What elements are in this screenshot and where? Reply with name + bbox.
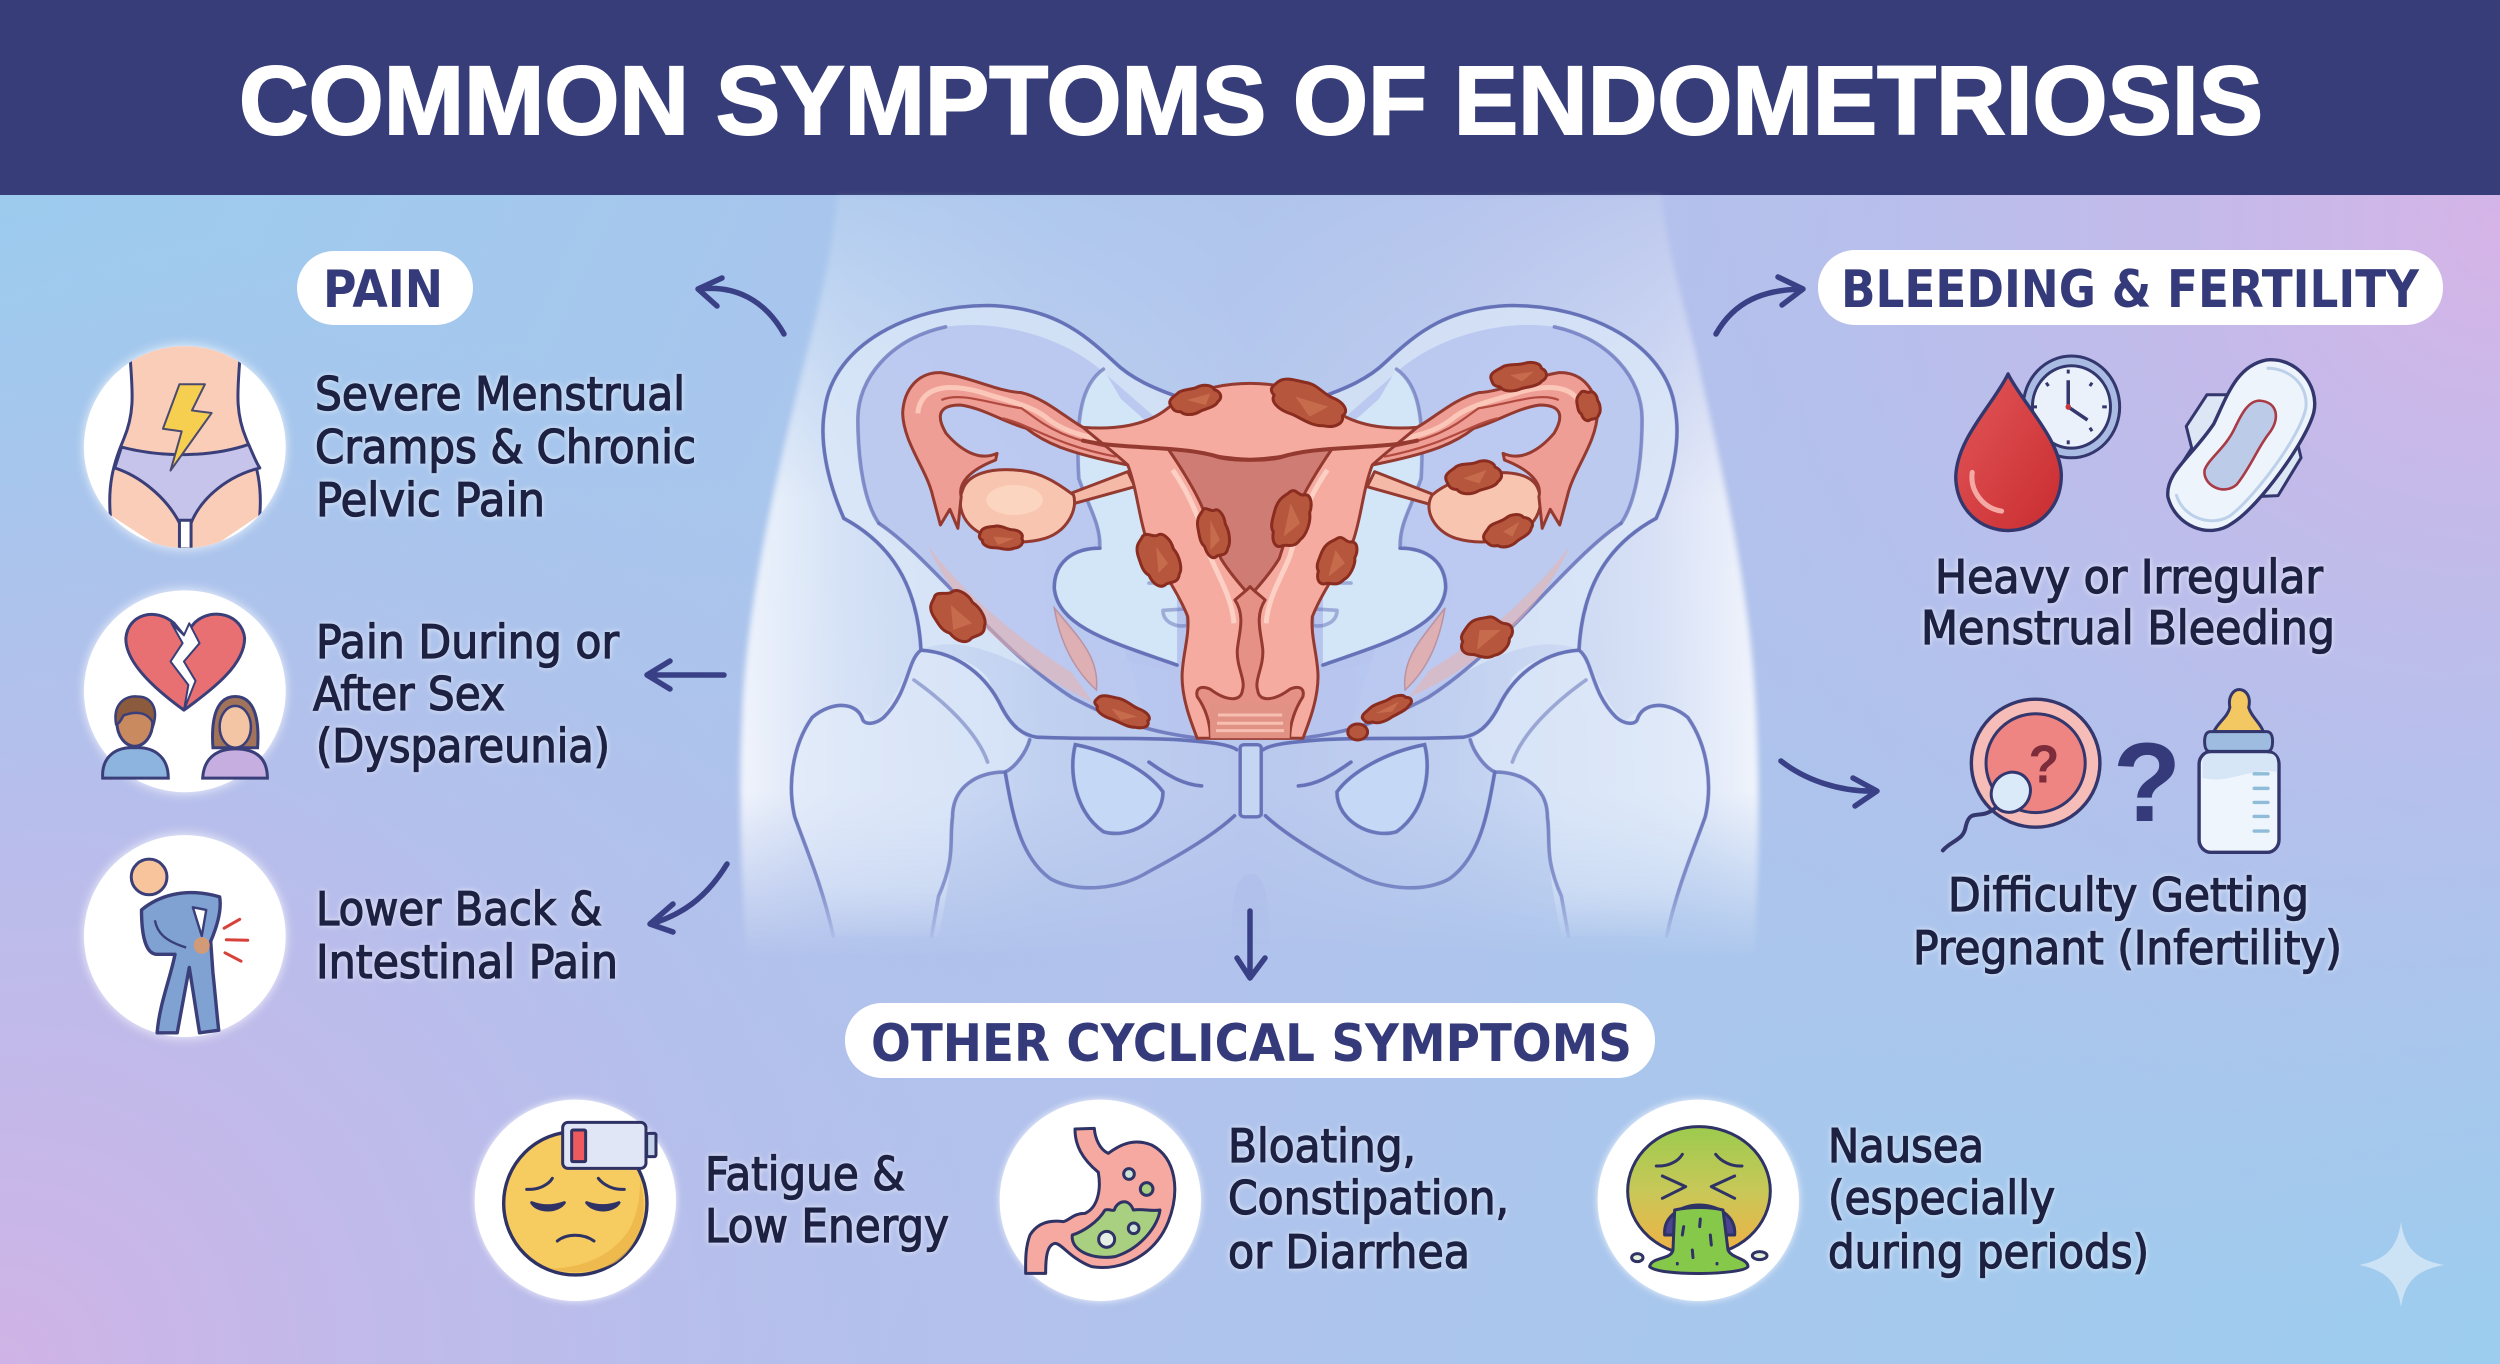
- icon: blood drop and clock: [1956, 356, 2120, 531]
- left half of pelvis: [791, 305, 1237, 936]
- uterine cavity: [1168, 449, 1332, 597]
- header banner: [0, 0, 2500, 195]
- pubic symphysis: [1240, 745, 1261, 817]
- text: pain during sex: [313, 615, 619, 773]
- text: severe menstrual cramps: Severe Menstrual: [315, 367, 685, 421]
- icon: question mark: ?: [2113, 720, 2181, 845]
- text: severe menstrual cramps: Cramps & Chronic: [315, 420, 696, 474]
- heading pill: pain: [297, 251, 473, 325]
- arrow to other symptoms: [1237, 911, 1265, 978]
- icon: egg and sperm: ?: [2028, 735, 2059, 795]
- icon: baby bottle: [2199, 689, 2279, 852]
- ovary ligaments: [1066, 472, 1435, 505]
- fallopian tube right: [1337, 373, 1597, 528]
- text: nausea: during periods): [1828, 1225, 2149, 1279]
- right half of pelvis: [1263, 305, 1709, 936]
- text: difficulty getting pregnant: Pregnant (Infertility): [1913, 921, 2342, 975]
- text: heavy or irregular bleeding: Menstrual Bleeding: [1921, 601, 2335, 655]
- ovary left: [960, 470, 1075, 542]
- text: bloating: Constipation,: [1228, 1171, 1509, 1225]
- text: lower back pain: [316, 882, 618, 989]
- text: bloating: or Diarrhea: [1228, 1225, 1470, 1279]
- uterus body: [1083, 383, 1417, 738]
- heading pill: other cyclical symptoms: OTHER CYCLICAL SYMPTOMS: [871, 1014, 1632, 1074]
- lesion cluster on uterus and tubes: [922, 359, 1603, 740]
- icon: stomach: [1000, 1100, 1201, 1301]
- pelvis skeleton: [791, 305, 1709, 946]
- arrow to bleeding: [1716, 277, 1803, 334]
- text: difficulty getting pregnant: [1913, 868, 2342, 975]
- text: fatigue: [705, 1147, 949, 1253]
- ovary right: [1429, 473, 1541, 542]
- text: heavy or irregular bleeding: Heavy or Irregular: [1935, 550, 2323, 604]
- text: lower back pain: Intestinal Pain: [316, 935, 618, 989]
- panel: pain: [84, 251, 696, 1037]
- sacrum bowl: [1047, 508, 1453, 678]
- text: pain during sex: After Sex: [313, 667, 505, 721]
- panel: bleeding and fertility: [1818, 250, 2443, 975]
- coccyx shape: [1231, 874, 1270, 946]
- iliac wing left: [825, 308, 1172, 670]
- text: nausea: (especially: [1828, 1171, 2055, 1225]
- text: pain during sex: (Dyspareunia): [316, 719, 610, 773]
- ligaments: [928, 546, 1570, 702]
- text: severe menstrual cramps: Pelvic Pain: [316, 473, 545, 527]
- text: fatigue: Low Energy: [705, 1199, 949, 1253]
- sacral marks: [1149, 583, 1351, 626]
- text: severe menstrual cramps: [315, 367, 696, 527]
- heading pill: pain: PAIN: [323, 260, 443, 320]
- icon: tired face with low battery: [475, 1100, 676, 1301]
- title: COMMON SYMPTOMS OF ENDOMETRIOSIS: [239, 46, 2263, 155]
- endometriosis lesions: [922, 359, 1603, 740]
- text: bloating: Bloating,: [1228, 1119, 1416, 1173]
- arrow to pain during sex: [647, 661, 724, 689]
- icon: nauseated face: [1598, 1100, 1799, 1301]
- arrow to lower back pain: [650, 864, 727, 932]
- text: difficulty getting pregnant: Difficulty Getting: [1948, 868, 2309, 922]
- body silhouette: [740, 195, 1758, 960]
- person: man: [103, 696, 168, 778]
- arrow to pain: [698, 278, 784, 334]
- icon: broken heart and couple: [84, 590, 286, 792]
- text: nausea: [1828, 1119, 2149, 1279]
- text: heavy or irregular bleeding: [1921, 550, 2335, 655]
- cervical canal: [1197, 587, 1303, 738]
- text: fatigue: Fatigue &: [705, 1147, 905, 1201]
- sparkle star: [2359, 1222, 2444, 1307]
- uterus, tubes and ovaries: [903, 359, 1603, 740]
- arrow to infertility: [1781, 761, 1877, 806]
- icon: sanitary pad: [2168, 360, 2315, 530]
- fallopian tube left: [903, 373, 1163, 528]
- icon: back pain figure: [84, 835, 286, 1037]
- icon: abdomen with lightning: [84, 346, 286, 554]
- text: lower back pain: Lower Back &: [316, 882, 602, 936]
- hip bone left: [791, 650, 1030, 936]
- panel: other cyclical symptoms: [475, 1003, 2149, 1301]
- person: woman: [203, 697, 267, 778]
- text: nausea: Nausea: [1828, 1119, 1984, 1173]
- icon: egg and sperm: [1943, 699, 2100, 850]
- heading pill: bleeding and fertility: BLEEDING & FERTILITY: [1841, 260, 2420, 320]
- text: bloating: [1228, 1119, 1509, 1279]
- text: pain during sex: Pain During or: [316, 615, 619, 669]
